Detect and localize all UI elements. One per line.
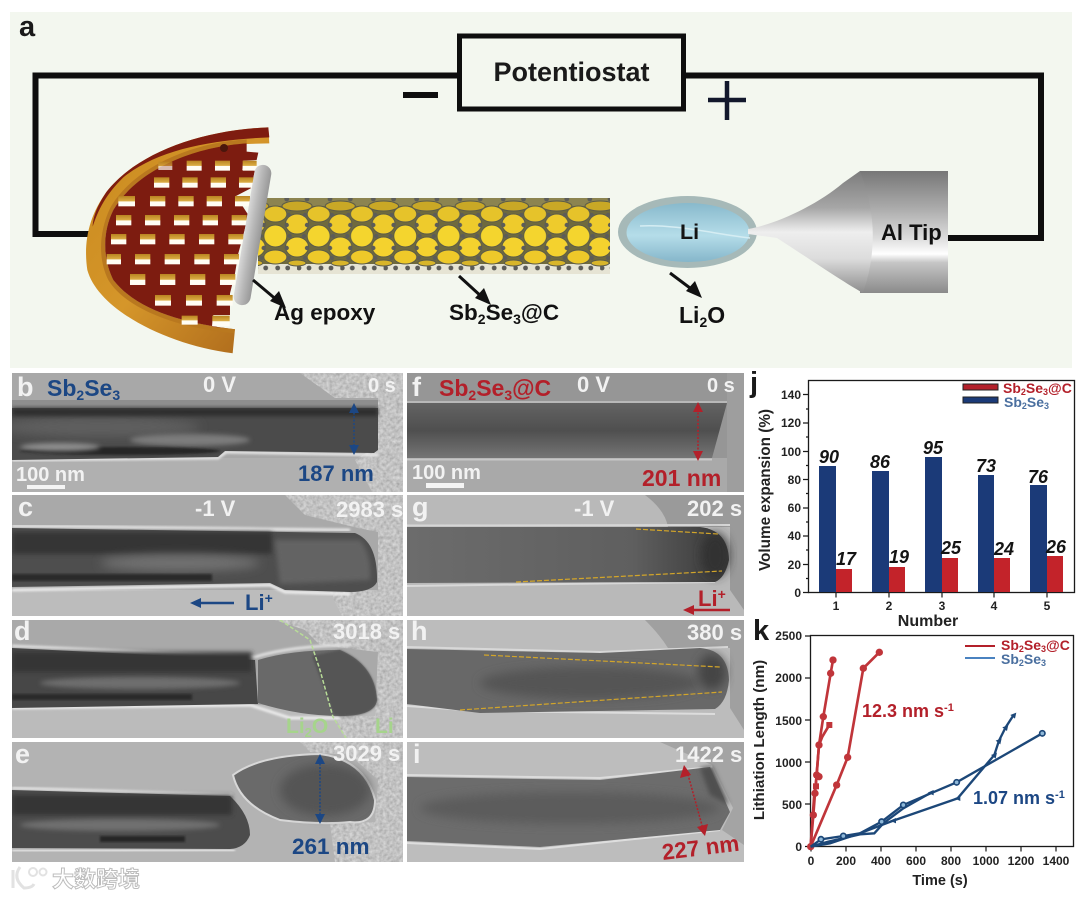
y axis title: Volume expansion (%) (757, 409, 774, 571)
y tick labels: 120 (781, 416, 801, 430)
half TEM grid (86, 127, 269, 353)
x tick labels: 1200 (1008, 854, 1035, 868)
Li2O shell and Li metal (618, 196, 757, 268)
labels g (412, 492, 742, 615)
labels b: 0 V (203, 372, 236, 397)
arrow and label: Ag epoxy: Ag epoxy (274, 300, 376, 325)
arrow and label: Li2O: O (707, 302, 725, 328)
x tick labels: 3 (939, 599, 946, 613)
y tick labels: 80 (788, 473, 801, 487)
labels d: Li (375, 715, 394, 738)
panel: h TEM Sb2Se3@C 380 s (407, 616, 744, 738)
bar value labels: 17 (836, 549, 857, 569)
legend: @C (1046, 637, 1070, 653)
x tick labels: 200 (836, 854, 856, 868)
labels f: 0 s (707, 375, 735, 397)
arrow and label: Li2O (670, 273, 725, 330)
labels c: Li (245, 590, 265, 615)
labels d (14, 616, 400, 740)
x tick labels: 1000 (973, 854, 1000, 868)
legend: Sb (1004, 394, 1022, 410)
labels f: 3 (504, 387, 512, 403)
y tick labels: 20 (788, 558, 801, 572)
panel: g TEM Sb2Se3@C 202 s (407, 492, 744, 616)
plus sign (708, 81, 746, 120)
panel label j: j (749, 367, 758, 399)
y tick labels: 2500 (775, 629, 802, 643)
legend: Sb (1003, 380, 1021, 396)
rate label blue: -1 (1055, 789, 1065, 801)
legend: Se (1024, 651, 1041, 667)
panel: e TEM Sb2Se3 3029 s (12, 739, 403, 862)
labels d: 3018 s (333, 619, 400, 644)
legend: Se (1024, 637, 1041, 653)
chart frame and ticks (803, 380, 1074, 598)
carbon nanotube with Sb2Se3 (258, 198, 610, 274)
Al tip (748, 171, 948, 293)
y tick labels (781, 388, 801, 600)
Al tip: Al Tip (881, 220, 942, 245)
panel: i TEM Sb2Se3@C 1422 s (407, 739, 744, 865)
arrow and label: Sb2Se3@C: Sb (449, 300, 478, 325)
legend: Sb (1001, 651, 1019, 667)
panel: a, experiment schematic (10, 11, 1072, 368)
rate label red: 12.3 nm s (862, 701, 944, 721)
arrow and label: Sb2Se3@C: 3 (513, 311, 521, 327)
arrow and label: Sb2Se3@C (449, 276, 559, 327)
legend: 3 (1043, 387, 1048, 397)
legend: 2 (1022, 401, 1027, 411)
x tick labels: 1400 (1043, 854, 1070, 868)
legend: 2 (1019, 658, 1024, 668)
panel label a: a (19, 11, 36, 43)
labels b: 0 s (368, 375, 396, 397)
labels d: 2 (305, 725, 312, 740)
bar value labels: 95 (923, 438, 944, 458)
y tick labels: 60 (788, 501, 801, 515)
potentiostat box: Potentiostat (493, 57, 650, 87)
panel: b TEM Sb2Se3 0 s (0, 372, 403, 492)
labels i: i (413, 739, 421, 769)
legend: Sb (1001, 637, 1019, 653)
x tick labels: 4 (991, 599, 998, 613)
watermark: 大数跨境 (52, 867, 140, 892)
labels c: + (265, 590, 273, 606)
labels e: 261 nm (292, 834, 370, 859)
y tick labels: 140 (781, 388, 801, 402)
labels c: c (18, 492, 33, 522)
labels f: Se (476, 375, 504, 401)
labels e: 3029 s (333, 741, 400, 766)
labels h (411, 616, 742, 710)
labels i: 1422 s (675, 742, 742, 767)
Sb2Se3 bars (819, 457, 1047, 592)
y tick labels (775, 629, 802, 854)
Ag epoxy blob (232, 164, 273, 306)
x tick labels (808, 854, 1070, 868)
labels b: 3 (112, 387, 120, 403)
legend: Se (1026, 380, 1043, 396)
x tick labels: 1 (833, 599, 840, 613)
legend: Se (1027, 394, 1044, 410)
x axis title: Number (898, 613, 958, 630)
x tick labels: 400 (871, 854, 891, 868)
labels f: Sb (439, 375, 468, 401)
labels b: 100 nm (16, 464, 85, 486)
y axis title: Lithiation Length (nm) (751, 660, 768, 820)
panel label k: k (753, 615, 770, 647)
rate label blue: 1.07 nm s (973, 788, 1055, 808)
legend: 2 (1021, 387, 1026, 397)
bar value labels: 90 (819, 447, 839, 467)
x tick labels: 5 (1044, 599, 1051, 613)
panel: j volume expansion bar chart (749, 367, 1074, 630)
labels f: 201 nm (642, 465, 721, 491)
watermark (13, 867, 140, 892)
legend (965, 637, 1070, 668)
labels d: d (14, 616, 30, 646)
chart frame and ticks (805, 636, 1074, 852)
labels f (412, 372, 735, 491)
labels c: -1 V (195, 496, 236, 521)
arrow and label: Sb2Se3@C: Se (486, 300, 513, 325)
labels e (16, 746, 400, 854)
labels g: -1 V (574, 496, 615, 521)
minus sign (403, 92, 438, 98)
panel: f TEM Sb2Se3@C 0 s (407, 372, 744, 492)
legend: 2 (1019, 644, 1024, 654)
y tick labels: 2000 (775, 671, 802, 685)
labels g: 202 s (687, 496, 742, 521)
x tick labels: 2 (886, 599, 893, 613)
labels b: 187 nm (298, 461, 374, 486)
labels i (413, 739, 742, 865)
y tick labels: 40 (788, 529, 801, 543)
bar value labels: 86 (870, 452, 891, 472)
bar value labels: 76 (1028, 467, 1049, 487)
y tick labels: 1500 (775, 714, 802, 728)
panel: c TEM Sb2Se3 2983 s (12, 492, 403, 616)
circuit wires (36, 76, 1041, 238)
Sb2Se3@C bars (836, 556, 1063, 592)
schematic background (10, 12, 1072, 368)
y tick labels: 100 (781, 445, 801, 459)
arrow and label: Li2O: Li (679, 302, 699, 328)
potentiostat box (460, 36, 684, 109)
labels f: f (412, 372, 422, 402)
labels c (19, 500, 402, 610)
arrow and label: Sb2Se3@C: 2 (478, 311, 486, 327)
labels h: 380 s (687, 620, 742, 645)
labels d: Li (286, 715, 305, 738)
labels b: Sb (47, 375, 76, 401)
arrow and label: Sb2Se3@C: @C (521, 300, 559, 325)
labels g: + (718, 586, 726, 602)
bar value labels: 26 (1045, 537, 1067, 557)
bar value labels: 24 (993, 539, 1014, 559)
labels b: Se (84, 375, 112, 401)
labels g: g (412, 492, 428, 522)
legend: @C (1048, 380, 1072, 396)
Li2O shell and Li metal: Li (680, 220, 699, 244)
arrow and label: Li2O: 2 (699, 314, 707, 330)
labels f: @C (512, 375, 551, 401)
Sb2Se3 series (811, 713, 1045, 847)
labels g: Li (698, 586, 718, 611)
legend (963, 380, 1072, 411)
x tick labels (833, 599, 1051, 613)
panel: d TEM Sb2Se3 3018 s (12, 616, 403, 740)
legend: 3 (1041, 644, 1046, 654)
labels e: e (15, 739, 30, 769)
labels f: 2 (468, 387, 476, 403)
x tick labels: 600 (906, 854, 926, 868)
x tick labels: 0 (808, 854, 815, 868)
labels d: O (312, 715, 328, 738)
labels b: b (17, 372, 34, 402)
bar value labels: 25 (940, 538, 962, 558)
labels b: 2 (76, 387, 84, 403)
arrow and label: Ag epoxy (253, 280, 376, 325)
rate label red: -1 (944, 702, 954, 714)
labels h: h (411, 616, 428, 646)
legend: 3 (1044, 401, 1049, 411)
labels i: 227 nm (661, 831, 741, 865)
x tick labels: 800 (941, 854, 961, 868)
bar value labels (819, 438, 1067, 569)
bar value labels: 73 (976, 456, 996, 476)
labels c: 2983 s (336, 497, 403, 522)
legend: 3 (1041, 658, 1046, 668)
y tick labels: 500 (782, 798, 802, 812)
Sb2Se3@C series (807, 649, 883, 850)
y tick labels: 0 (794, 586, 801, 600)
x axis title: Time (s) (912, 873, 968, 889)
labels b (16, 372, 396, 489)
labels f: 100 nm (412, 462, 481, 484)
y tick labels: 1000 (775, 756, 802, 770)
panel: k lithiation length line chart (751, 615, 1074, 889)
bar value labels: 19 (889, 547, 909, 567)
y tick labels: 0 (795, 840, 802, 854)
labels f: 0 V (577, 372, 610, 397)
